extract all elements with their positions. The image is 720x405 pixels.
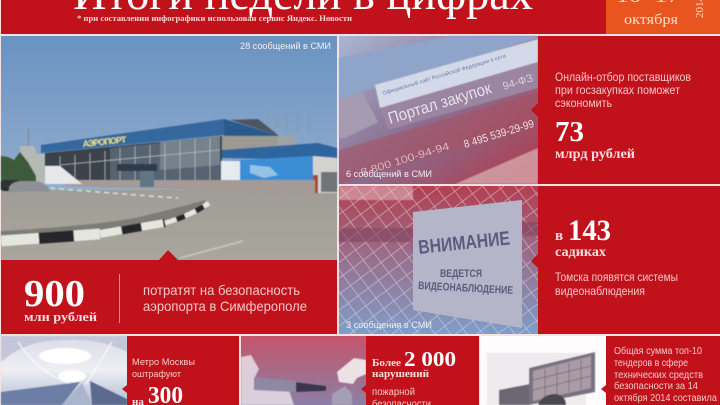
warning sign: ВЕДЕТСЯ <box>440 268 482 280</box>
unit: млрд рублей <box>555 147 635 162</box>
description: при госзакупках поможет <box>555 83 680 97</box>
panel: surveillance statistic <box>531 186 720 334</box>
warning sign: ВНИМАНИЕ <box>417 227 511 259</box>
number 2000: Более <box>372 358 401 369</box>
unit: садиках <box>555 245 606 260</box>
panel: metro statistic <box>122 336 239 405</box>
description: аэропорта в Симферополе <box>143 298 307 314</box>
description: потратят на безопасность <box>143 282 300 298</box>
panel: fire safety statistic <box>361 336 479 405</box>
description <box>143 282 307 314</box>
number 143: 143 <box>568 214 611 247</box>
terminal building <box>41 109 337 194</box>
number 300 <box>132 383 183 405</box>
caption: surveillance mentions: 3 сообщения в СМИ <box>346 320 432 331</box>
date badge <box>606 0 720 34</box>
number 2000 <box>372 347 456 371</box>
description: видеонаблюдения <box>555 284 645 298</box>
panel: procurement portal photo: 8 495 539-29-99 <box>462 118 536 151</box>
header: title band <box>1 0 607 34</box>
description <box>132 357 195 380</box>
panel: airport photo <box>1 36 337 260</box>
description <box>614 345 717 404</box>
control tower and trees <box>1 128 45 192</box>
panel: procurement portal photo: Официальный сайт Российской Федерации в сети <box>382 53 507 97</box>
description: Онлайн-отбор поставщиков <box>555 70 691 84</box>
description: сэкономить <box>555 96 612 110</box>
description: пожарной <box>372 387 415 398</box>
number 900: 900 <box>24 273 85 315</box>
unit: нарушений <box>372 368 430 380</box>
caption: portal mentions: 6 сообщений в СМИ <box>346 169 432 180</box>
panel: metro photo <box>1 336 127 405</box>
panel: fire extinguisher photo <box>241 336 366 405</box>
warning sign: ВИДЕОНАБЛЮДЕНИЕ <box>418 280 513 297</box>
description: Томска появятся системы <box>555 270 678 284</box>
description: технических средств <box>614 370 703 381</box>
description: безопасности за 14 <box>614 380 698 392</box>
subtitle note: * при составлении инфографики использован сервис Яндекс. Новости <box>77 13 352 23</box>
number 73: 73 <box>555 117 584 148</box>
panel: procurement portal photo: 94-ФЗ <box>501 72 535 93</box>
number 143: в <box>555 228 563 244</box>
divider <box>119 274 120 323</box>
panel: procurement portal photo <box>339 36 538 184</box>
portal heading text: Портал закупок <box>386 79 494 128</box>
description <box>372 387 431 405</box>
description: оштрафуют <box>132 369 182 380</box>
panel: procurement statistic <box>531 36 720 184</box>
warning sign <box>413 200 522 328</box>
number 2000: 2 000 <box>404 347 456 371</box>
unit: млн рублей <box>24 309 98 324</box>
description: Общая сумма топ-10 <box>614 345 702 357</box>
sign: airport: АЭРОПОРТ <box>82 134 127 149</box>
description: Метро Москвы <box>132 357 195 368</box>
parked cars <box>1 180 50 192</box>
description: тендеров в сфере <box>614 357 688 369</box>
panel: airport statistic <box>1 250 337 334</box>
panel: security monitors photo <box>480 336 606 405</box>
date badge: октября <box>624 12 678 28</box>
panel: video surveillance photo <box>339 186 538 334</box>
description <box>555 70 691 110</box>
panel: procurement portal photo: 8 800 100-94-94 <box>359 140 451 179</box>
caption: airport mentions: 28 сообщений в СМИ <box>240 41 331 52</box>
panel: tenders statistic <box>601 336 720 405</box>
road curb <box>1 188 243 258</box>
description <box>555 270 678 298</box>
